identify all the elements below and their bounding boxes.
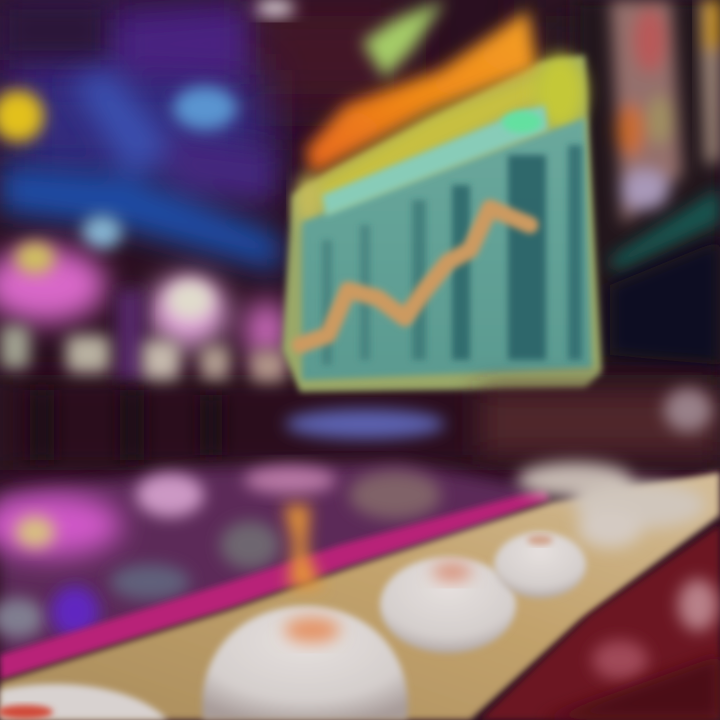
far white domes	[517, 462, 706, 548]
teal beam	[610, 188, 720, 272]
chart header highlight	[502, 111, 542, 133]
grey tile	[110, 564, 190, 600]
colourful betting surface	[0, 462, 550, 680]
chart border	[282, 55, 602, 392]
signboard: far right panel	[700, 0, 720, 165]
pink glow right	[244, 300, 288, 360]
machine screens	[0, 325, 286, 382]
chart board	[282, 0, 602, 392]
dark blue recess	[610, 240, 720, 365]
icon: blue light	[173, 86, 237, 130]
signboard: colourful panel	[610, 0, 682, 225]
ceiling lights	[0, 0, 295, 249]
dome: large front	[202, 606, 408, 720]
icon: pale blue light	[82, 215, 122, 249]
pale tiles	[136, 473, 204, 517]
pink glow left	[0, 247, 107, 323]
right background lights	[480, 388, 720, 455]
line chart: orange trend	[300, 208, 530, 345]
orange banner	[305, 10, 545, 210]
pink area left	[0, 493, 122, 557]
row of slot machines	[0, 242, 720, 470]
icon: white light	[255, 0, 295, 16]
table top	[0, 472, 720, 720]
dark machine bases	[30, 390, 222, 460]
background: ceiling	[0, 0, 720, 180]
dark red carpet	[480, 525, 720, 720]
chart bars	[322, 145, 582, 365]
magenta rail	[0, 488, 550, 680]
chart header band	[322, 105, 548, 216]
grey tile left	[0, 598, 44, 638]
violet patch	[51, 586, 99, 638]
blue table strip	[285, 409, 445, 439]
dome: bottom left	[0, 684, 168, 720]
icon: orange figurine	[284, 505, 322, 588]
dome: middle	[380, 557, 516, 653]
white domes on table	[0, 532, 586, 720]
dome: rear	[494, 532, 586, 598]
icon: yellow light	[0, 90, 44, 142]
right wall panels	[575, 0, 720, 400]
machine column	[116, 290, 144, 380]
background: blue ceiling band	[0, 10, 280, 272]
pink glow middle	[148, 276, 228, 348]
yellow-green corner	[534, 54, 586, 130]
icon: green leaf	[362, 0, 445, 78]
dark floor band	[0, 375, 720, 470]
chart screen	[302, 118, 592, 380]
